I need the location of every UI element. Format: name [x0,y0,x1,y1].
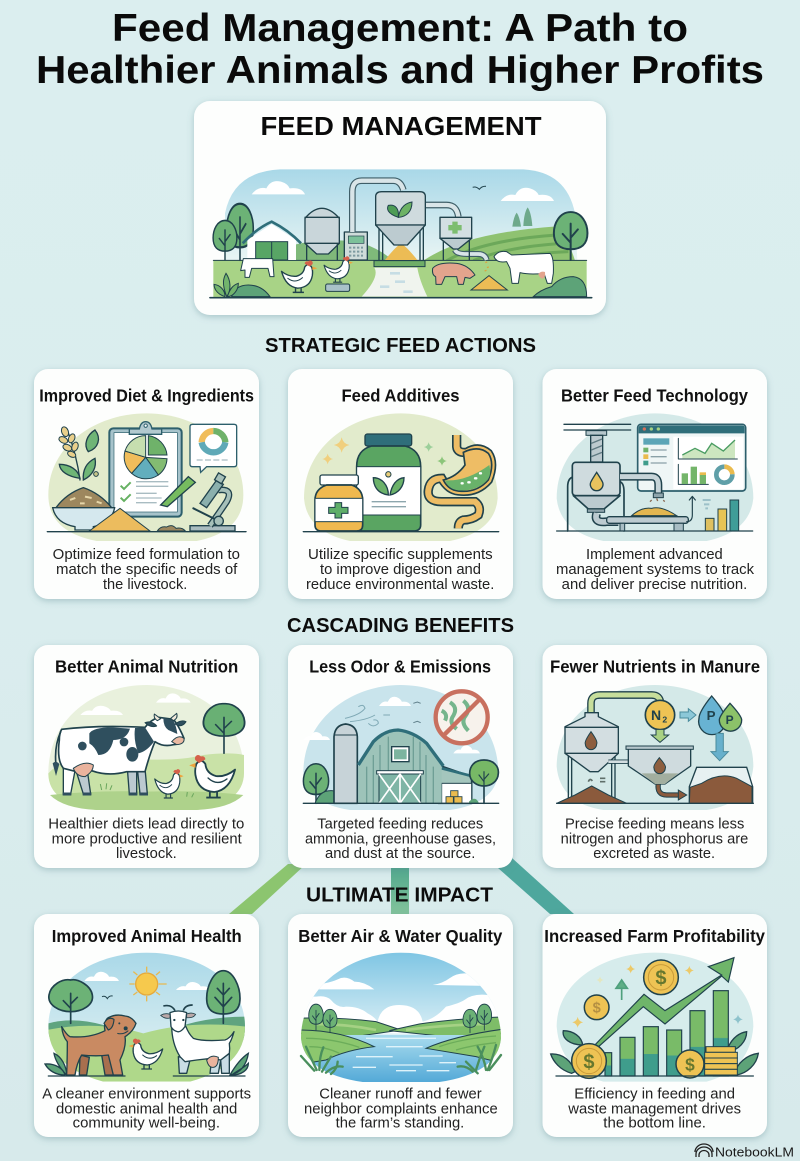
illustration: rising profit chart and coins: $ [685,1054,695,1074]
green pipe [591,695,661,715]
card description [561,816,748,862]
card description: and dust at the source. [325,846,475,862]
hills [301,1018,398,1035]
pie chart [124,436,167,479]
card description: Optimize feed formulation to [53,547,240,563]
barn [247,224,296,260]
card description: excreted as waste. [593,846,715,862]
illustration: farm feed mill with livestock [210,169,592,298]
heading: cascading benefits: CASCADING BENEFITS [287,614,514,637]
card description [304,1086,498,1132]
clipboard [109,428,182,517]
heading: strategic feed actions: STRATEGIC FEED ACTIONS [265,334,536,357]
card description [42,1086,251,1132]
panel: better feed technology [542,369,767,599]
speech bubble chart [190,424,237,472]
connector: green band to improved animal health [229,864,306,914]
livestock [241,259,274,277]
card description: and deliver precise nutrition. [562,577,747,593]
illustration: feed machine and dashboard [557,413,753,541]
illustration: rising profit chart and coins [551,953,758,1082]
N2 badge [645,700,675,730]
card description: Targeted feeding reduces [317,816,483,832]
card description: Efficiency in feeding and [574,1086,735,1102]
bushes [232,277,587,297]
title [36,7,764,92]
heading: ultimate impact: ULTIMATE IMPACT [306,884,493,907]
card description [53,547,240,593]
card heading: Improved Animal Health [52,926,242,946]
bowl and feed [56,488,112,508]
delivery pipe [620,477,658,493]
card description: more productive and resilient [52,831,242,847]
card heading: Better Air & Water Quality [298,926,503,946]
card description: neighbor complaints enhance [304,1101,498,1117]
illustration: nitrogen and phosphorus flow to manure: 2 [662,715,667,725]
card description: domestic animal health and [56,1101,237,1117]
sparkles [626,964,635,973]
illustration: supplement jars and stomach [303,413,499,541]
grass [301,1045,501,1074]
panel: less odor and emissions [288,645,513,868]
illustration: rising profit chart and coins: $ [583,1051,595,1073]
manure bin [689,767,753,803]
card description: match the specific needs of [56,562,238,578]
card description [48,816,244,862]
panel: better air and water quality [288,914,513,1137]
small hopper [443,238,469,260]
pipes [352,181,403,232]
panel: increased farm profitability [542,914,767,1137]
trees [49,980,92,1023]
card description: A cleaner environment supports [42,1086,251,1102]
panel: feed management hero [194,101,606,315]
coins [644,960,678,995]
card description: waste management drives [567,1101,741,1117]
card description: the farm’s standing. [336,1116,464,1132]
coin stack [705,1047,737,1075]
P drops [699,696,725,735]
silo [334,724,357,803]
illustration: barn, silo and no-emissions sign [303,685,499,810]
card description: livestock. [116,846,177,862]
silo [568,753,615,803]
cow legs [63,767,75,794]
card heading: Less Odor & Emissions [309,657,491,677]
logo: NotebookLM: NotebookLM [715,1146,794,1160]
card heading: Fewer Nutrients in Manure [550,657,760,677]
illustration: rising profit chart and coins: $ [593,1001,601,1017]
card description: nitrogen and phosphorus are [561,831,748,847]
card heading: Better Animal Nutrition [55,657,238,677]
card description [305,816,496,862]
card description: Precise feeding means less [565,816,744,832]
goat [161,1005,234,1073]
bars [605,991,728,1076]
panel: improved animal health [34,914,259,1137]
card heading: Better Feed Technology [561,386,748,406]
tree [469,760,498,803]
card description: Utilize specific supplements [308,547,493,563]
card description: the bottom line. [603,1116,706,1132]
panel: feed additives [288,369,513,599]
pencil [161,477,195,507]
illustration: diet plan, feed and microscope [47,413,246,541]
card description: community well-being. [73,1116,220,1132]
card description [567,1086,741,1132]
trend arrow [590,958,734,1050]
illustration: dog, hen and goat in meadow [45,952,248,1083]
cow body [59,717,184,774]
card description: ammonia, greenhouse gases, [305,831,496,847]
trend arrow and bars [687,496,695,522]
illustration: dairy cow and hens [48,685,245,810]
connector: central band to better air and water quality [391,866,409,916]
dog [62,1015,136,1075]
connector: teal band to increased farm profitability [498,858,574,914]
panel: improved diet and ingredients [34,369,259,599]
barn wing [438,765,477,803]
card heading: Improved Diet & Ingredients [39,386,254,406]
title: Feed Management: A Path to [112,7,688,50]
card description: Cleaner runoff and fewer [319,1086,482,1102]
card description: to improve digestion and [320,562,481,578]
illustration: clean lake and green hills [296,950,509,1085]
lake [301,1035,501,1082]
dashboard [638,424,746,491]
main hopper [374,261,425,267]
illustration: nitrogen and phosphorus flow to manure: N [651,707,661,723]
clouds [319,973,480,990]
leaves [551,1031,758,1075]
card description [306,547,494,593]
no emissions sign [436,691,488,743]
control panel [344,232,367,260]
panel: fewer nutrients in manure [542,645,767,868]
coins: $ [655,968,667,990]
wheat and leaves [67,430,80,480]
bowl [658,783,679,795]
microscope [190,526,235,531]
illustration: nitrogen and phosphorus flow to manure: P [726,713,734,727]
small jar [320,475,358,485]
sun [129,967,167,1001]
card heading: Increased Farm Profitability [544,926,765,946]
card description: the livestock. [103,577,187,593]
heading: feed management: FEED MANAGEMENT [260,113,542,141]
card description: Healthier diets lead directly to [48,816,244,832]
hen [129,1039,163,1069]
stomach [428,435,492,528]
panel: better animal nutrition [34,645,259,868]
illustration: nitrogen and phosphorus flow to manure [557,685,753,810]
silo [305,208,339,254]
card heading: Feed Additives [342,386,460,406]
plants [45,1053,248,1075]
card description: Implement advanced [586,547,723,563]
road [362,268,427,297]
card description: reduce environmental waste. [306,577,494,593]
large jar [365,434,412,446]
title: Healthier Animals and Higher Profits [36,49,764,92]
logo: NotebookLM [695,1144,794,1160]
illustration: nitrogen and phosphorus flow to manure: P [707,708,716,723]
card description: management systems to track [556,562,755,578]
card description [556,547,755,593]
main barn [358,730,442,803]
